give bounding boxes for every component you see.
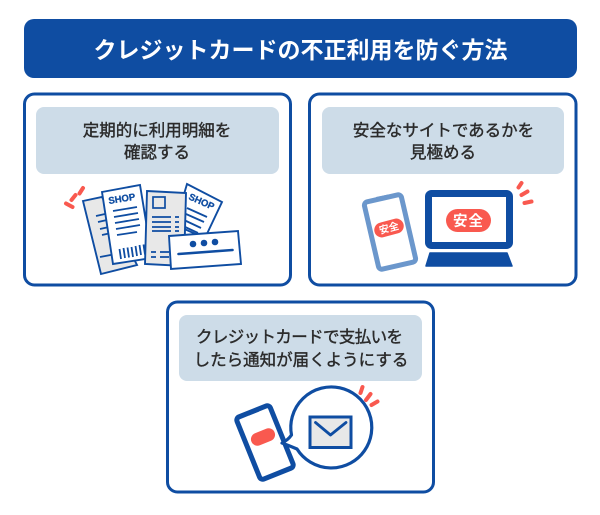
icon: smartphone with safe badge: 安全 <box>378 219 400 237</box>
title banner <box>24 19 577 78</box>
icon: smartphone with notification <box>236 405 294 480</box>
icon: receipts and statements <box>66 184 241 274</box>
panel: check statements <box>24 94 290 285</box>
heading: verify safe site: 安全なサイトであるかを <box>353 121 534 140</box>
heading: payment notifications <box>179 315 422 381</box>
heading: payment notifications: したら通知が届くようにする <box>194 350 408 370</box>
heading: check statements: 定期的に利用明細を <box>83 121 231 140</box>
icon: laptop with safe badge <box>426 183 532 266</box>
icon: receipts and statements: SHOP <box>108 192 137 207</box>
title banner: クレジットカードの不正利用を防ぐ方法 <box>94 37 508 63</box>
heading: verify safe site <box>322 107 564 174</box>
icon: laptop with safe badge: 安全 <box>453 212 484 230</box>
icon: receipts and statements: SHOP <box>187 192 216 213</box>
icon: smartphone with safe badge <box>364 194 416 270</box>
heading: check statements <box>36 107 279 174</box>
heading: check statements: 確認する <box>124 143 190 162</box>
panel: payment notifications <box>168 302 434 492</box>
heading: verify safe site: 見極める <box>410 143 476 162</box>
heading: payment notifications: クレジットカードで支払いを <box>196 328 403 346</box>
icon: speech bubble with envelope <box>282 387 378 468</box>
panel: verify safe site <box>310 94 576 285</box>
